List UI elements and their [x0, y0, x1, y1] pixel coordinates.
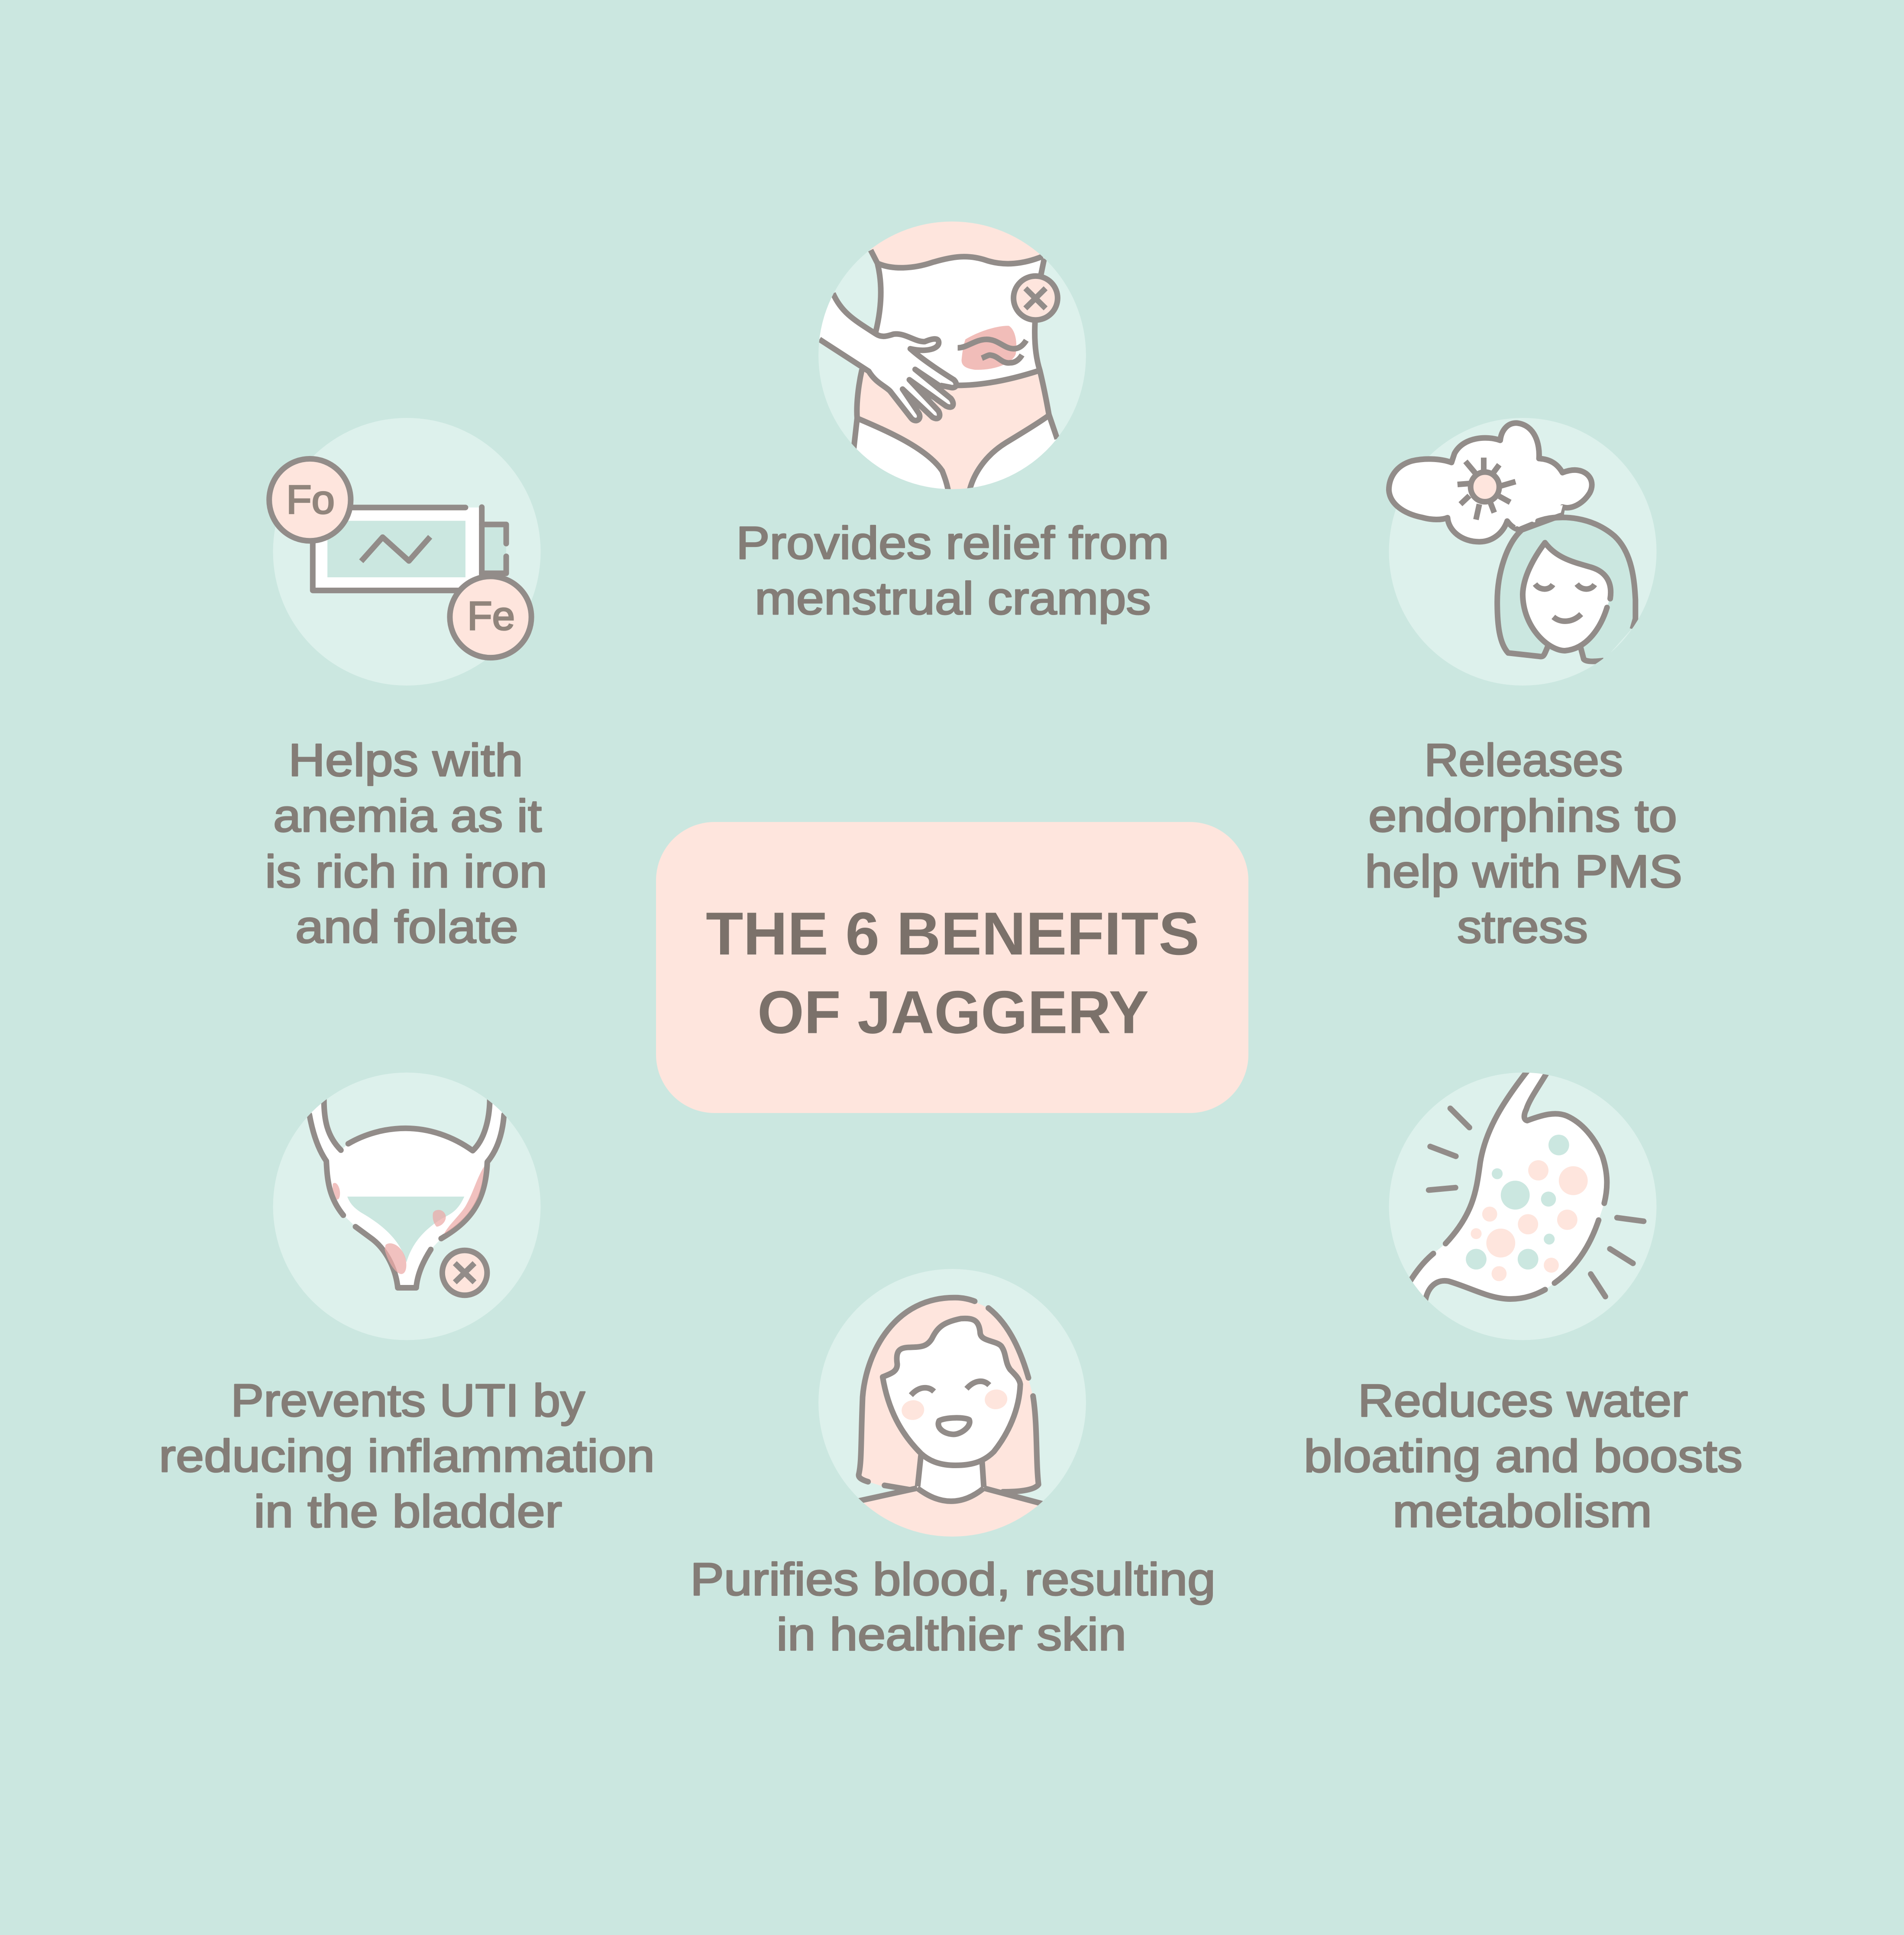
panel: PMS stress: [1365, 418, 1682, 953]
caption: anemia: and folate: [295, 902, 518, 953]
icon: hand on abdomen: [813, 217, 1086, 495]
caption: UTI: reducing inflammation: [159, 1430, 655, 1482]
panel: title: THE 6 BENEFITS: [706, 900, 1199, 968]
caption: bloating: bloating and boosts: [1304, 1431, 1742, 1482]
panel: title: [656, 822, 1248, 1113]
caption: PMS stress: stress: [1457, 902, 1588, 953]
caption: UTI: [159, 1375, 655, 1537]
caption: healthier skin: Purifies blood, resulting: [690, 1554, 1215, 1605]
caption: anemia: Helps with: [288, 735, 523, 786]
caption: cramps: [736, 518, 1169, 624]
icon: stomach: [1389, 1070, 1657, 1340]
caption: healthier skin: in healthier skin: [776, 1609, 1126, 1660]
caption: UTI: in the bladder: [254, 1486, 562, 1537]
caption: PMS stress: Releases: [1424, 735, 1623, 786]
icon: woman with happy thought cloud: [1389, 418, 1657, 686]
icon: iron and folate battery: [269, 418, 540, 686]
panel: UTI: [159, 1072, 655, 1537]
caption: anemia: anemia as it: [273, 790, 542, 841]
caption: anemia: is rich in iron: [265, 846, 547, 897]
caption: UTI: Prevents UTI by: [231, 1375, 585, 1426]
panel: anemia: [265, 418, 547, 953]
caption: PMS stress: help with PMS: [1365, 846, 1682, 897]
caption: cramps: Provides relief from: [736, 518, 1169, 569]
caption: cramps: menstrual cramps: [755, 573, 1151, 624]
panel: title: OF JAGGERY: [757, 978, 1149, 1046]
label: Fe: Fe: [467, 593, 515, 638]
icon: smiling woman: [818, 1269, 1086, 1541]
caption: bloating: [1304, 1375, 1742, 1537]
caption: PMS stress: [1365, 735, 1682, 953]
caption: bloating: Reduces water: [1358, 1375, 1688, 1426]
caption: anemia: [265, 735, 547, 953]
icon: bladder: [273, 1072, 540, 1340]
infographic canvas: [162, 222, 1742, 1651]
caption: PMS stress: endorphins to: [1368, 790, 1677, 841]
panel: bloating: [1304, 1070, 1742, 1537]
caption: bloating: metabolism: [1393, 1485, 1652, 1537]
panel: healthier skin: [690, 1269, 1215, 1660]
panel: menstrual cramps: [736, 217, 1169, 624]
caption: healthier skin: [690, 1554, 1215, 1660]
label: Fo: Fo: [286, 477, 335, 522]
